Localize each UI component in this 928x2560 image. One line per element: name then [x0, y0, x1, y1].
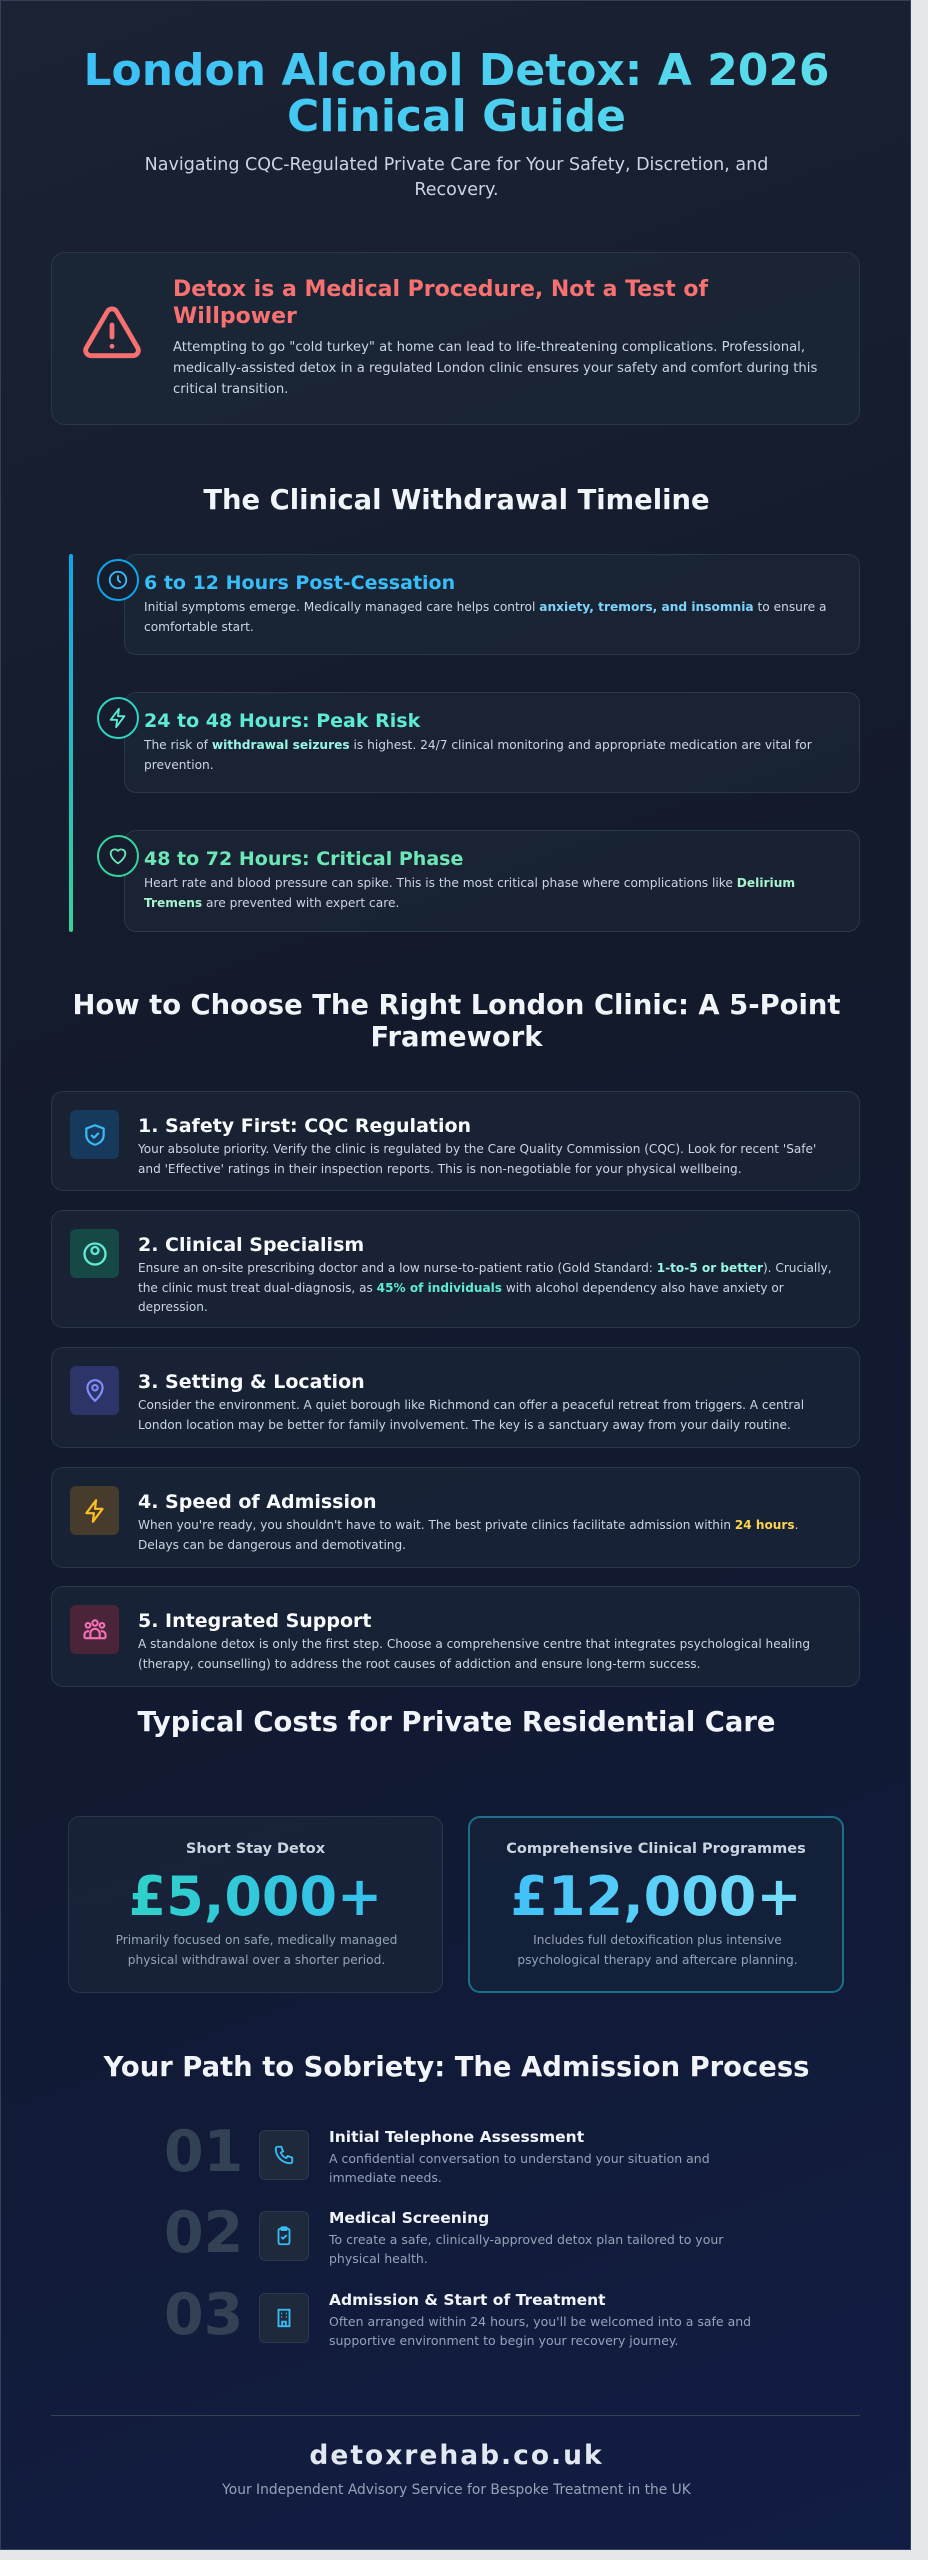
footer tagline: Your Independent Advisory Service for Bespoke Treatment in the UK [222, 2482, 691, 2498]
timeline card 1: Initial symptoms emerge. Medically managed care helps control anxiety, tremors, and insomnia to ensure a comfortable start. [144, 600, 826, 634]
framework card 1 [51, 1091, 860, 1191]
framework card 4: When you're ready, you shouldn't have to wait. The best private clinics facilitate admission within 24 hours. Delays can be dangerous and demotivating. [138, 1518, 798, 1552]
framework card 4: 4. Speed of Admission [138, 1491, 377, 1513]
step 1: Initial Telephone Assessment [329, 2128, 584, 2146]
icon: shield [70, 1110, 119, 1159]
timeline card 3: 48 to 72 Hours: Critical Phase [144, 848, 463, 870]
alert text: Attempting to go "cold turkey" at home can lead to life-threatening complications. Professional, medically-assisted detox in a regulated London clinic ensures your safety and comfort during this critical transition. [173, 340, 817, 397]
cost card: comprehensive [468, 1816, 844, 1993]
cost card: comprehensive: Includes full detoxification plus intensive psychological therapy and aftercare planning. [517, 1933, 798, 1966]
timeline card 3: Heart rate and blood pressure can spike. This is the most critical phase where complications like Delirium Tremens are prevented with expert care. [144, 876, 795, 910]
icon: phone [259, 2130, 309, 2180]
timeline card 1: 6 to 12 Hours Post-Cessation [144, 572, 455, 594]
step 3: Admission & Start of Treatment [329, 2291, 606, 2309]
icon: warning [83, 306, 141, 358]
cost card: short stay: £5,000+ [129, 1865, 382, 1928]
step 2 [164, 2200, 724, 2266]
framework card 3: 3. Setting & Location [138, 1371, 365, 1393]
framework card 5: A standalone detox is only the first step. Choose a comprehensive centre that integrates psychological healing (therapy, counselling) to address the root causes of addiction and ensure long-term success. [138, 1637, 810, 1670]
icon: building [259, 2293, 309, 2343]
step 2: 02 [164, 2200, 243, 2266]
subtitle: Navigating CQC-Regulated Private Care for Your Safety, Discretion, and Recovery. [145, 155, 768, 200]
step 2: Medical Screening [329, 2209, 489, 2227]
alert heading: Detox is a Medical Procedure, Not a Test of Willpower [173, 277, 708, 329]
cost card: short stay: Primarily focused on safe, medically managed physical withdrawal over a shorter period. [116, 1933, 397, 1966]
footer domain: detoxrehab.co.uk [309, 2440, 604, 2471]
step 3 [164, 2282, 751, 2348]
title: London Alcohol Detox: A 2026 [83, 45, 830, 96]
title: Clinical Guide [287, 91, 626, 142]
heading: framework: Framework [371, 1022, 542, 1053]
step 1 [164, 2119, 710, 2185]
timeline card 2: The risk of withdrawal seizures is highest. 24/7 clinical monitoring and appropriate medication are vital for prevention. [144, 738, 812, 772]
timeline card 3 [124, 830, 860, 932]
icon: people [70, 1605, 119, 1654]
icon: bolt [97, 697, 139, 739]
framework card 2: 2. Clinical Specialism [138, 1234, 364, 1256]
framework card 4 [51, 1467, 860, 1568]
heading: framework: How to Choose The Right London Clinic: A 5-Point [73, 990, 840, 1021]
heading: admission: Your Path to Sobriety: The Admission Process [104, 2052, 809, 2083]
icon: bolt [70, 1486, 119, 1535]
framework card 5 [51, 1586, 860, 1687]
step 3: 03 [164, 2282, 243, 2348]
cost card: short stay: Short Stay Detox [186, 1841, 325, 1857]
icon: location pin [70, 1366, 119, 1415]
title [1, 48, 912, 140]
framework card 2 [51, 1210, 860, 1328]
timeline line [69, 554, 73, 932]
timeline card 1 [124, 554, 860, 655]
step 1: 01 [164, 2119, 243, 2185]
timeline card 2: 24 to 48 Hours: Peak Risk [144, 710, 420, 732]
framework card 3: Consider the environment. A quiet borough like Richmond can offer a peaceful retreat from triggers. A central London location may be better for family involvement. The key is a sanctuary away from your daily routine. [138, 1398, 804, 1432]
step 2: To create a safe, clinically-approved detox plan tailored to your physical health. [329, 2232, 723, 2266]
cost card: comprehensive: Comprehensive Clinical Programmes [506, 1841, 806, 1857]
step 3: Often arranged within 24 hours, you'll be welcomed into a safe and supportive environment to begin your recovery journey. [329, 2314, 751, 2348]
cost card: comprehensive: £12,000+ [510, 1865, 802, 1928]
icon: clock [97, 559, 139, 601]
icon: clipboard [259, 2211, 309, 2261]
timeline card 2 [124, 692, 860, 793]
icon: brain [70, 1229, 119, 1278]
framework card 1: 1. Safety First: CQC Regulation [138, 1115, 471, 1137]
alert panel [51, 252, 860, 425]
cost card: short stay [68, 1816, 443, 1993]
framework card 2: Ensure an on-site prescribing doctor and a low nurse-to-patient ratio (Gold Standard: 1-to-5 or better). Crucially, the clinic must treat dual-diagnosis, as 45% of individuals with alcohol dependency also have anxiety or depression. [138, 1261, 832, 1314]
heading: timeline: The Clinical Withdrawal Timeline [203, 485, 710, 516]
heading: framework [73, 990, 840, 1053]
step 1: A confidential conversation to understand your situation and immediate needs. [329, 2151, 710, 2185]
heading: costs: Typical Costs for Private Residential Care [138, 1707, 775, 1738]
framework card 3 [51, 1347, 860, 1448]
framework card 1: Your absolute priority. Verify the clinic is regulated by the Care Quality Commission (CQC). Look for recent 'Safe' and 'Effective' ratings in their inspection reports. This is non-negotiable for your physical wellbeing. [138, 1142, 816, 1176]
framework card 5: 5. Integrated Support [138, 1610, 372, 1632]
icon: heart [97, 835, 139, 877]
